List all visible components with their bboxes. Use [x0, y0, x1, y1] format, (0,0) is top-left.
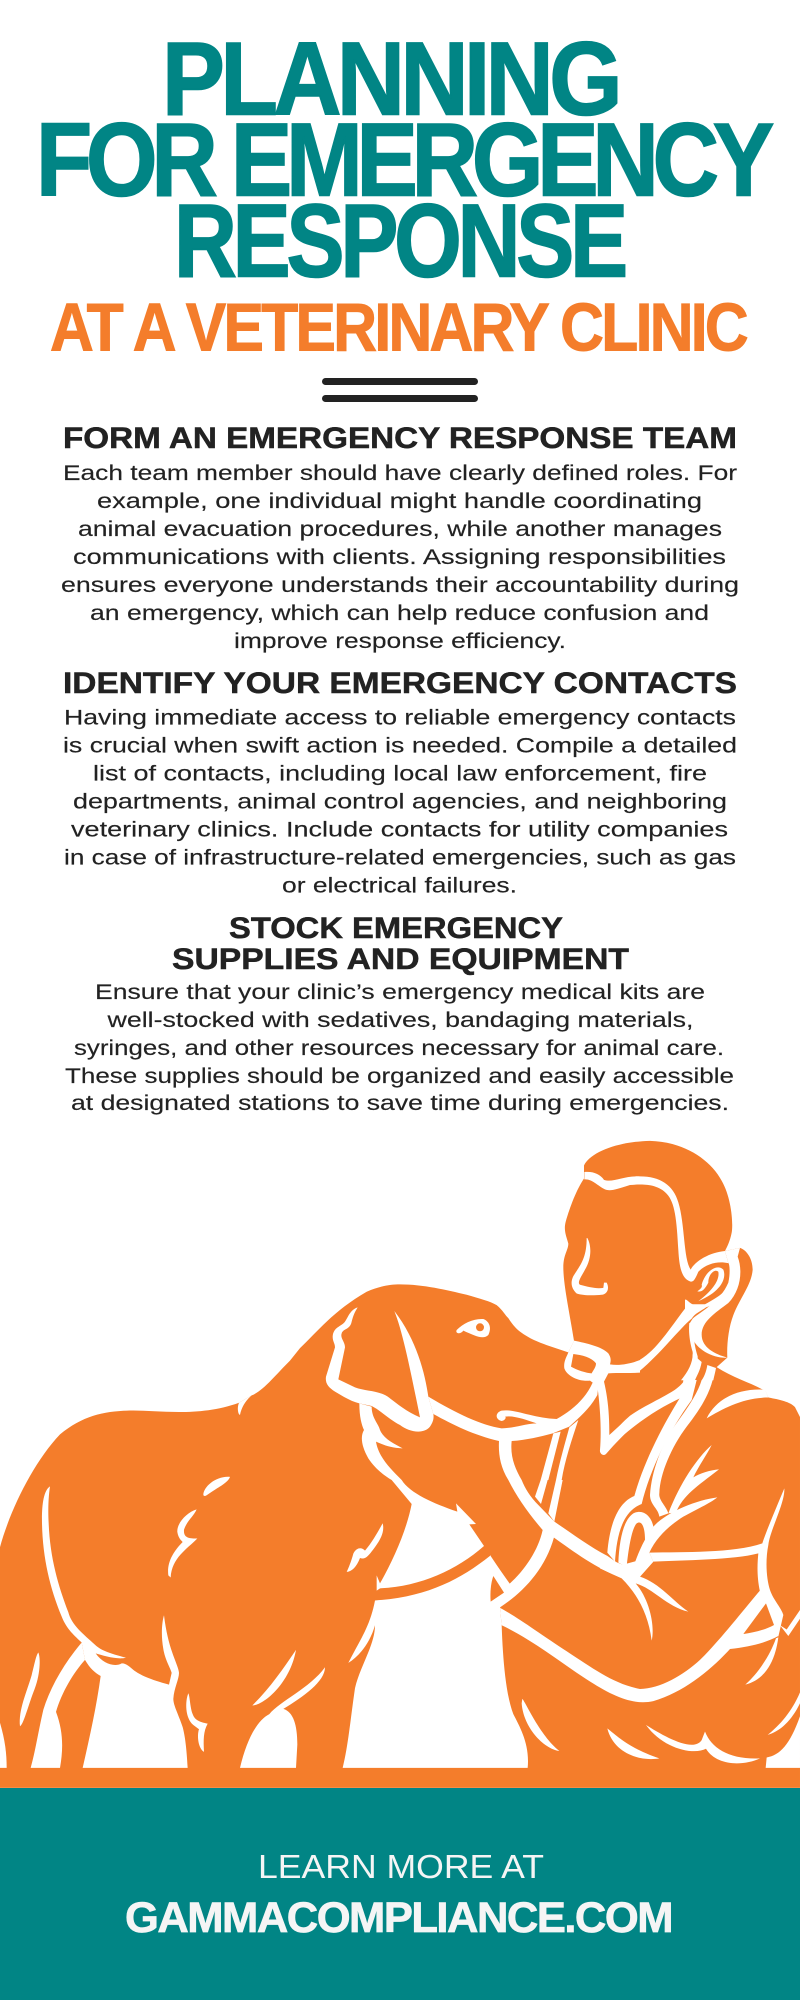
white gaps between legs and body [0, 1395, 528, 1768]
text block: contacts: list of contacts, including local law enforcement, fire [93, 762, 707, 786]
text block: supplies: well-stocked with sedatives, bandaging materials, [106, 1008, 693, 1032]
footer text: website: GAMMACOMPLIANCE.COM [125, 1894, 672, 1942]
orange silhouette of dog and vet with ground band [0, 1141, 800, 1788]
text block: form team: example, one individual might handle coordinating [97, 489, 702, 513]
text block: contacts: departments, animal control agencies, and neighboring [73, 790, 727, 814]
divider bars [322, 378, 478, 402]
heading: supplies [172, 912, 629, 976]
orange details on top of white lines [476, 1323, 774, 1634]
heading: contacts: IDENTIFY YOUR EMERGENCY CONTACTS [63, 667, 737, 700]
footer text: learn more: LEARN MORE AT [258, 1848, 544, 1885]
illustration: vet hugging dog [0, 1141, 800, 1788]
text block: contacts: is crucial when swift action is needed. Compile a detailed [63, 734, 737, 758]
text block: form team [61, 461, 739, 653]
panel: form an emergency response team [61, 422, 739, 653]
text block: supplies: These supplies should be organized and easily accessible [65, 1064, 734, 1088]
panel: identify your emergency contacts [63, 667, 737, 898]
white lines of vet body [500, 1172, 800, 1768]
text block: supplies: syringes, and other resources necessary for animal care. [74, 1036, 724, 1060]
stethoscope and chest lines [600, 1380, 784, 1641]
text block: form team: improve response efficiency. [234, 629, 566, 653]
text block: form team: an emergency, which can help reduce confusion and [90, 601, 709, 625]
text block: contacts: veterinary clinics. Include contacts for utility companies [71, 818, 728, 842]
text block: contacts: Having immediate access to reliable emergency contacts [64, 706, 736, 730]
text block: form team: ensures everyone understands their accountability during [61, 573, 739, 597]
white lines of hands and collar junction [377, 1480, 580, 1607]
footer panel [0, 1788, 800, 2000]
heading: supplies: SUPPLIES AND EQUIPMENT [172, 943, 629, 976]
text block: contacts: or electrical failures. [282, 874, 517, 898]
panel: stock emergency supplies [65, 912, 734, 1115]
title: PLANNING [162, 22, 618, 138]
title: RESPONSE [174, 184, 625, 300]
text block: supplies: Ensure that your clinic’s emergency medical kits are [95, 980, 705, 1004]
title [36, 22, 773, 300]
text block: form team: Each team member should have clearly defined roles. For [63, 461, 737, 485]
heading: form team: FORM AN EMERGENCY RESPONSE TEAM [63, 422, 737, 455]
heading: supplies: STOCK EMERGENCY [229, 912, 563, 945]
white lines of dog head, ear, muzzle [326, 1307, 640, 1480]
text block: contacts: in case of infrastructure-related emergencies, such as gas [64, 846, 736, 870]
icon: dog eye [456, 1319, 490, 1337]
text block: supplies [65, 980, 734, 1115]
text block: form team: animal evacuation procedures, while another manages [78, 517, 722, 541]
text block: supplies: at designated stations to save time during emergencies. [71, 1091, 729, 1115]
text block: contacts [63, 706, 737, 898]
text block: form team: communications with clients. Assigning responsibilities [73, 545, 726, 569]
